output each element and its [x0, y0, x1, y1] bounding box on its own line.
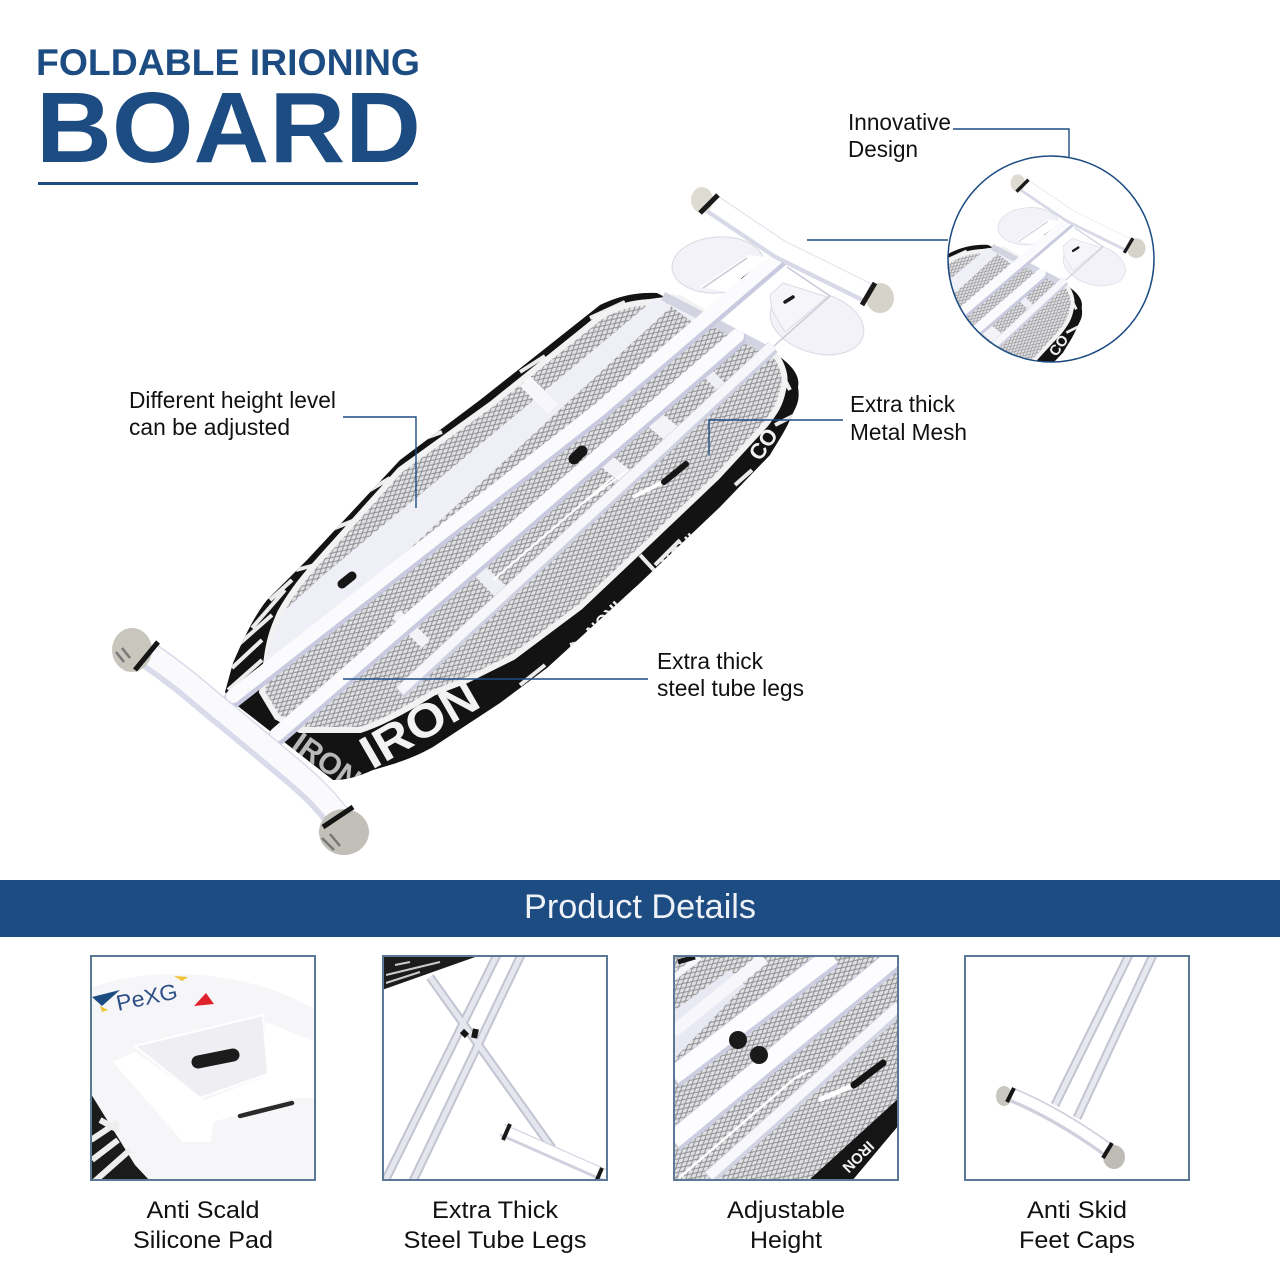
- frame ribs: [266, 294, 728, 672]
- board cover fabric: IRON: [350, 669, 488, 779]
- callout: steel tube legs: Extra thick: [657, 648, 763, 674]
- mesh surface with white piping: [262, 298, 785, 730]
- board cover fabric: IRON: [521, 665, 561, 705]
- panel: anti skid feet caps: [964, 955, 1190, 1254]
- callout: height level: [129, 387, 416, 508]
- callout: height level: can be adjusted: [129, 414, 290, 440]
- board cover fabric: [220, 285, 805, 797]
- product: ironing board underside: [112, 187, 894, 855]
- black fittings: [342, 438, 686, 584]
- panel: anti skid feet caps: Feet Caps: [1019, 1227, 1135, 1254]
- panel: adjustable height: IRON: [839, 1137, 877, 1176]
- long steel tube legs: [233, 255, 780, 737]
- panel: anti scald silicone pad: PeXG: [114, 979, 180, 1016]
- callout: metal mesh: [709, 391, 967, 455]
- panel: adjustable height: [673, 955, 899, 1254]
- bottom foot bar with caps: [112, 628, 369, 855]
- callout: innovative design: Innovative: [848, 109, 951, 135]
- callout: height level: Different height level: [129, 387, 336, 413]
- banner: product details: Product Details: [524, 888, 756, 926]
- caption: Extra Thick: [432, 1197, 559, 1224]
- board cover fabric: CO: [744, 423, 783, 465]
- third rail: [400, 345, 773, 693]
- top foot bar with caps: [691, 187, 894, 313]
- callout: metal mesh: Metal Mesh: [850, 419, 967, 445]
- caption: Anti Scald: [146, 1197, 260, 1224]
- callout: innovative design: [807, 109, 1069, 240]
- inset circle: top of the frame: [947, 155, 1155, 363]
- rest plate discs: [670, 234, 871, 365]
- board cover fabric: IRON: [657, 529, 701, 573]
- callout: steel tube legs: steel tube legs: [657, 675, 804, 701]
- callout: metal mesh: Extra thick: [850, 391, 955, 417]
- board cover fabric: IRON: [582, 597, 626, 641]
- caption: Anti Skid: [1027, 1197, 1127, 1224]
- panel: extra thick steel tube legs: [382, 955, 608, 1254]
- panel: anti scald silicone pad: Silicone Pad: [133, 1227, 273, 1254]
- panel: anti scald silicone pad: [90, 955, 316, 1254]
- title: FOLDABLE IRIONING: [36, 42, 420, 83]
- top cross bar: [663, 296, 767, 350]
- callout: steel tube legs: [343, 648, 804, 701]
- board cover fabric: IRON: [286, 727, 366, 797]
- callout: innovative design: Design: [848, 136, 918, 162]
- panel: extra thick steel tube legs: Steel Tube Legs: [404, 1227, 586, 1254]
- panel: adjustable height: Height: [750, 1227, 822, 1254]
- title: BOARD: [36, 72, 421, 184]
- caption: Adjustable: [727, 1197, 845, 1224]
- banner: product details: [0, 880, 1280, 937]
